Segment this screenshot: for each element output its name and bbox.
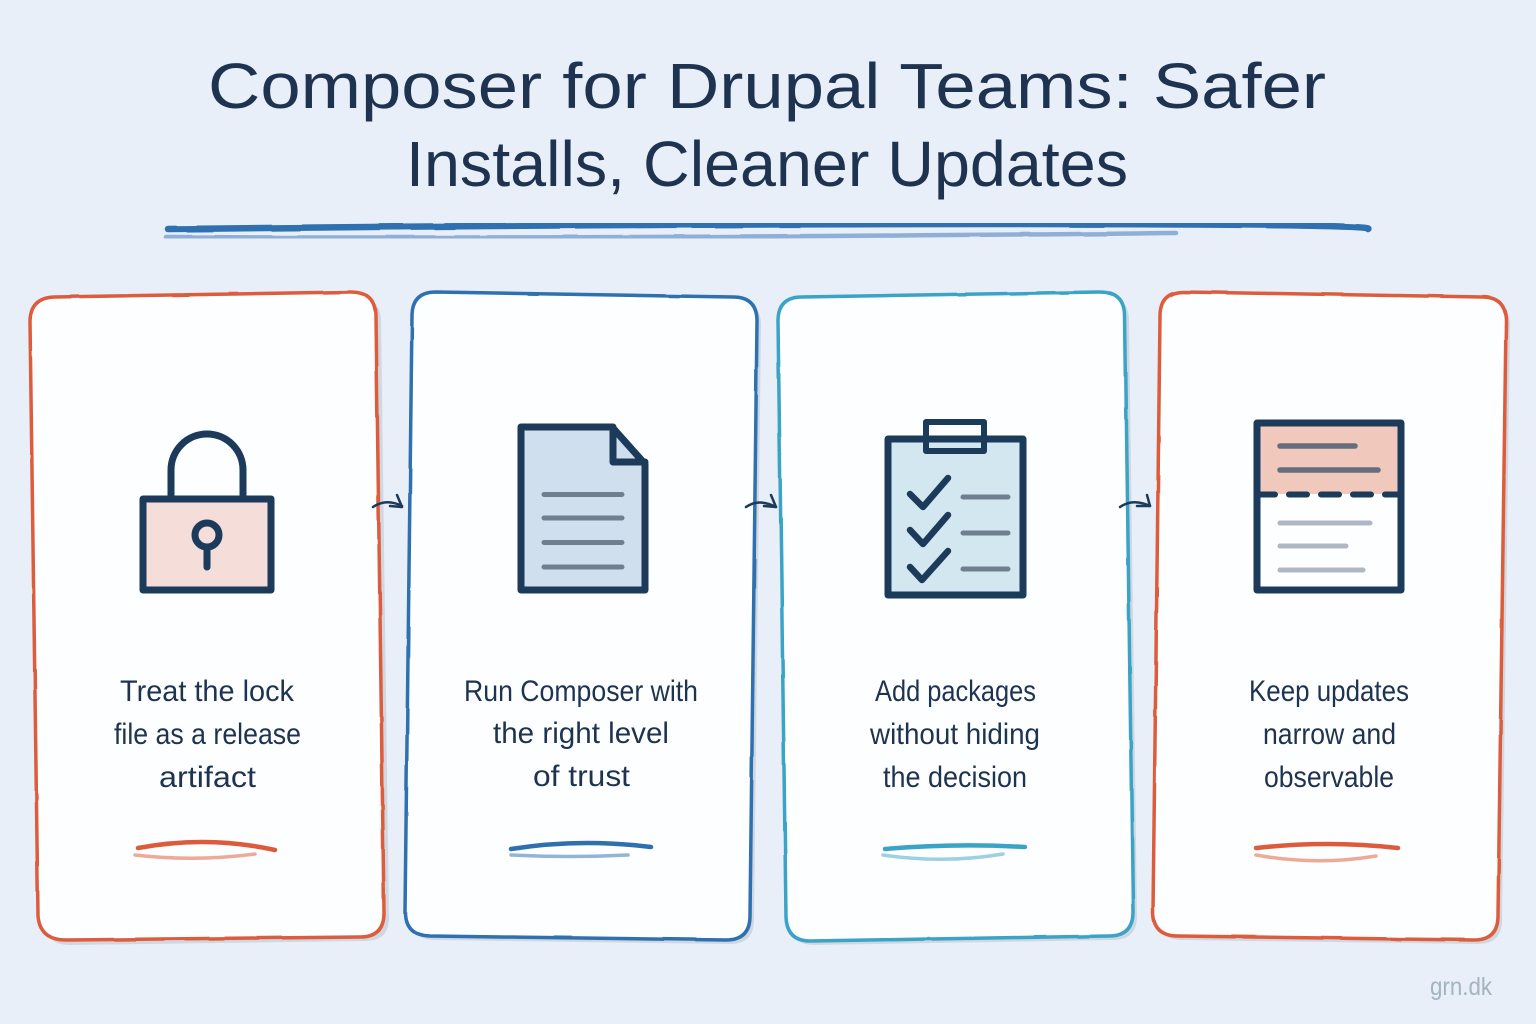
- text: add packages: without hiding: [869, 718, 1040, 751]
- text: run composer: [464, 675, 698, 793]
- text: run composer: the right level: [493, 717, 669, 750]
- arrow: step 2 to 3: [746, 495, 776, 507]
- panel: lock file: [30, 292, 389, 945]
- arrow: step 3 to 4: [1120, 495, 1150, 507]
- title: Composer for Drupal Teams: Safer: [208, 50, 1326, 122]
- title: Installs, Cleaner Updates: [406, 128, 1128, 200]
- accent underline: [135, 842, 275, 858]
- text: add packages: [869, 675, 1040, 794]
- text: add packages: the decision: [883, 761, 1027, 794]
- icon: document: [521, 427, 645, 590]
- arrow: step 1 to 2: [373, 495, 402, 507]
- text: keep updates: Keep updates: [1249, 675, 1409, 708]
- title underline: [166, 224, 1368, 238]
- icon: clipboard checklist: [888, 422, 1023, 595]
- panel: add packages: [778, 292, 1137, 945]
- panel: run composer: [405, 292, 761, 944]
- text: add packages: Add packages: [875, 675, 1036, 708]
- text: keep updates: [1249, 675, 1409, 794]
- accent underline: [883, 845, 1025, 859]
- text: run composer: Run Composer with: [464, 675, 698, 708]
- text: lock file: [114, 675, 301, 794]
- icon: padlock: [143, 434, 271, 590]
- title: [208, 50, 1326, 200]
- text: keep updates: narrow and: [1263, 718, 1396, 751]
- watermark: grn.dk: [1430, 973, 1492, 1001]
- text: lock file: Treat the lock: [120, 675, 295, 708]
- text: keep updates: observable: [1264, 761, 1394, 794]
- text: lock file: file as a release: [114, 718, 301, 751]
- accent underline: [1256, 844, 1398, 861]
- text: run composer: of trust: [533, 760, 631, 793]
- accent underline: [511, 843, 651, 856]
- text: lock file: artifact: [159, 761, 257, 794]
- panel: keep updates: [1153, 292, 1510, 944]
- icon: split document: [1257, 423, 1401, 590]
